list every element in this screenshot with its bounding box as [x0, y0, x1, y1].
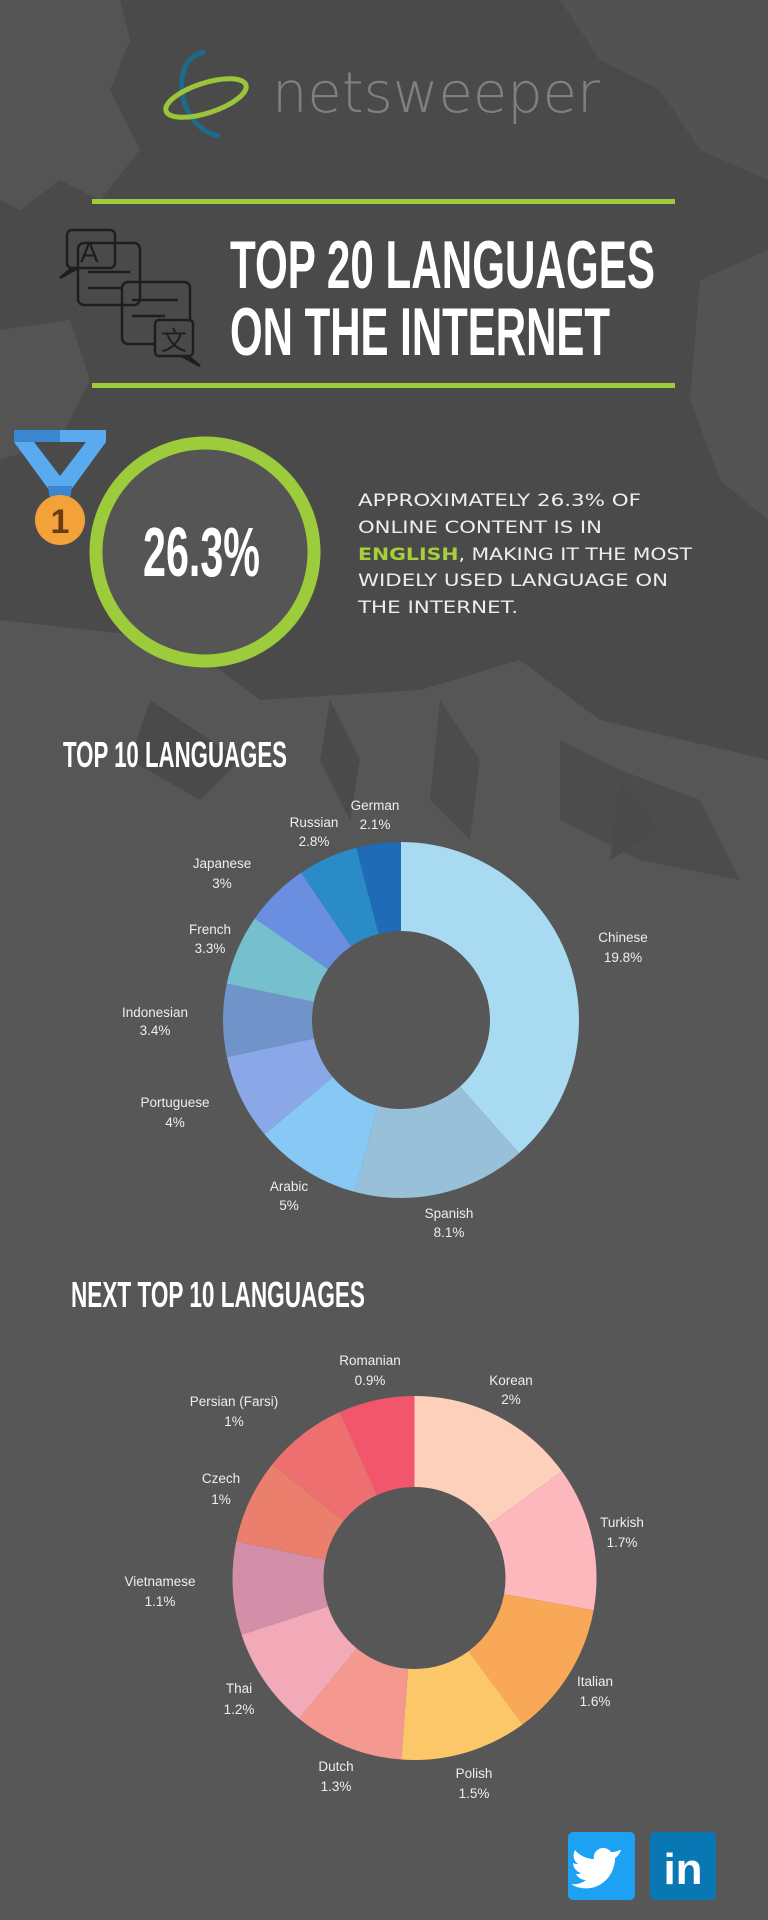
- chart labels: Russian: [290, 815, 338, 830]
- chart labels: [124, 1353, 644, 1801]
- chart labels: Portuguese: [140, 1095, 210, 1110]
- chart labels: 2.8%: [299, 834, 329, 849]
- chart labels: 3.3%: [195, 941, 225, 956]
- chart labels: 5%: [279, 1198, 299, 1213]
- icon: linkedin: in: [663, 1845, 703, 1894]
- chart labels: Chinese: [598, 930, 648, 945]
- icon: translate bubbles: 文: [161, 321, 187, 358]
- chart labels: Arabic: [270, 1179, 308, 1194]
- icon: linkedin: [650, 1832, 716, 1900]
- donut chart: top 10: [122, 798, 648, 1240]
- chart labels: 19.8%: [604, 950, 642, 965]
- chart labels: 1.5%: [459, 1786, 489, 1801]
- stat text: THE INTERNET.: [357, 598, 518, 618]
- chart labels: 2%: [501, 1392, 521, 1407]
- donut chart: next top 10: [124, 1353, 644, 1801]
- chart labels: French: [189, 922, 231, 937]
- chart labels: Turkish: [600, 1515, 644, 1530]
- chart labels: 1%: [224, 1414, 244, 1429]
- logo icon: [161, 52, 251, 136]
- stat text: WIDELY USED LANGUAGE ON: [358, 571, 668, 591]
- chart labels: 2.1%: [360, 817, 390, 832]
- chart labels: 1.2%: [224, 1702, 254, 1717]
- chart labels: 0.9%: [355, 1373, 385, 1388]
- chart labels: 1.6%: [580, 1694, 610, 1709]
- chart labels: Romanian: [339, 1353, 401, 1368]
- stat text: ONLINE CONTENT IS IN: [358, 518, 602, 538]
- chart labels: Vietnamese: [124, 1574, 196, 1589]
- icon: translate bubbles: A: [80, 237, 99, 268]
- icon: translate bubbles: [60, 230, 200, 366]
- chart labels: German: [351, 798, 399, 813]
- chart labels: Japanese: [193, 856, 251, 871]
- chart labels: Polish: [456, 1766, 492, 1781]
- chart labels: 4%: [165, 1115, 185, 1130]
- chart labels: 3%: [212, 876, 232, 891]
- chart labels: 1.1%: [145, 1594, 175, 1609]
- logo: [161, 52, 600, 136]
- chart labels: Thai: [226, 1681, 252, 1696]
- stat circle: 26.3%: [143, 513, 260, 591]
- chart labels: Spanish: [425, 1206, 473, 1221]
- heading: top 10: TOP 10 LANGUAGES: [63, 734, 287, 775]
- stat text: [357, 491, 693, 618]
- icon: twitter: [568, 1832, 635, 1900]
- title: [230, 227, 655, 370]
- medal icon: [14, 430, 106, 545]
- chart labels: 1.7%: [607, 1535, 637, 1550]
- chart labels: Korean: [489, 1373, 533, 1388]
- stat circle: [96, 443, 314, 661]
- stat text: APPROXIMATELY 26.3% OF: [358, 491, 641, 511]
- chart labels: Dutch: [318, 1759, 354, 1774]
- medal icon: 1: [51, 503, 69, 541]
- chart labels: Indonesian: [122, 1005, 188, 1020]
- chart labels: 1%: [211, 1492, 231, 1507]
- chart labels: Persian (Farsi): [190, 1394, 278, 1409]
- logo text: netsweeper: [272, 61, 600, 126]
- chart labels: 8.1%: [434, 1225, 464, 1240]
- chart labels: [122, 798, 648, 1240]
- chart labels: Italian: [577, 1674, 613, 1689]
- stat text: ENGLISH , MAKING IT THE MOST: [358, 545, 693, 565]
- chart labels: Czech: [202, 1471, 240, 1486]
- heading: next top 10: NEXT TOP 10 LANGUAGES: [71, 1274, 365, 1315]
- chart labels: 1.3%: [321, 1779, 351, 1794]
- chart labels: 3.4%: [140, 1023, 170, 1038]
